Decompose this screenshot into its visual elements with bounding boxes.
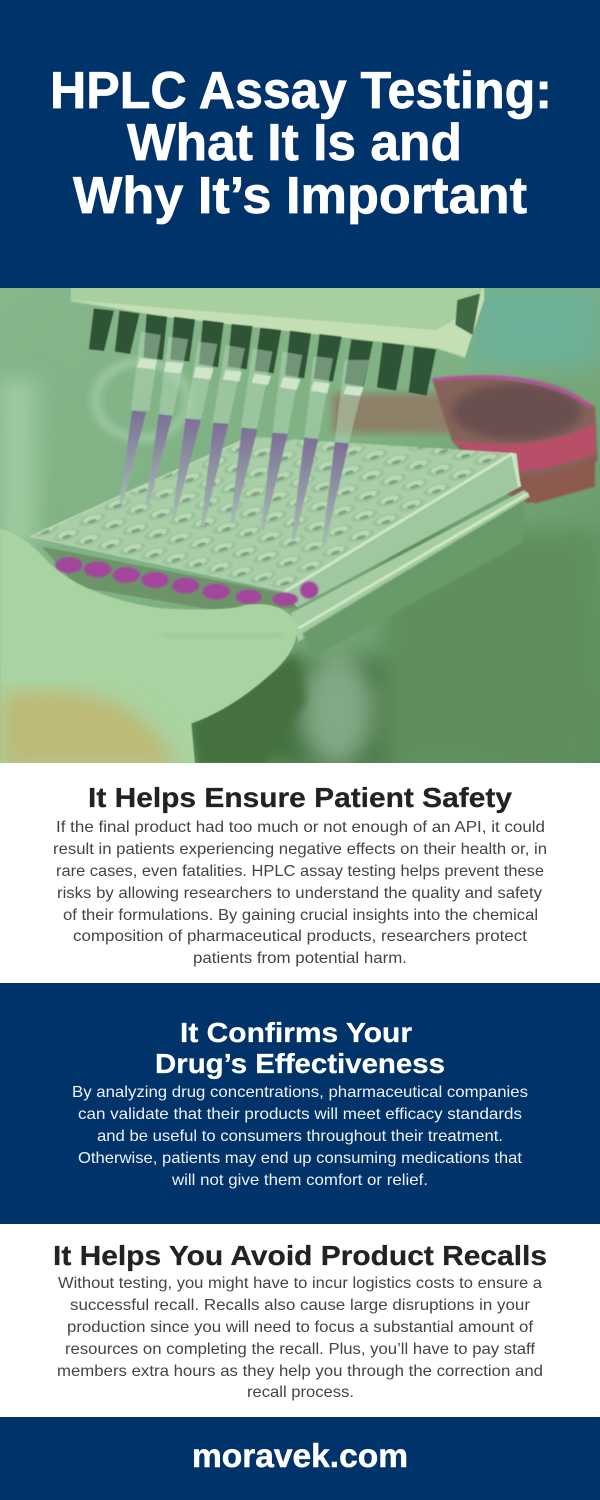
heading: effectiveness: It Confirms Your <box>180 1017 412 1048</box>
body: product recalls: recall process. <box>247 1384 354 1401</box>
footer panel <box>0 1417 600 1500</box>
body: effectiveness: By analyzing drug concentrations, pharmaceutical companies <box>72 1084 528 1101</box>
body: effectiveness: will not give them comfort or relief. <box>171 1172 428 1189</box>
body: patient safety: of their formulations. By gaining crucial insights into the chemical <box>63 907 538 924</box>
body: patient safety: rare cases, even fatalities. HPLC assay testing helps prevent these <box>56 863 544 880</box>
body: product recalls: production since you will need to focus a substantial amount of <box>67 1319 534 1336</box>
body: patient safety: patients from potential harm. <box>193 950 407 967</box>
panel: effectiveness <box>0 983 600 1224</box>
body: effectiveness <box>72 1084 528 1189</box>
body: product recalls: successful recall. Recalls also cause large disruptions in your <box>70 1297 531 1314</box>
title <box>50 62 552 225</box>
gloved hand and sleeve <box>0 528 306 767</box>
body: patient safety: If the final product had too much or not enough of an API, it could <box>56 819 545 836</box>
heading: patient safety: It Helps Ensure Patient Safety <box>88 782 512 813</box>
pipette head <box>71 287 484 358</box>
petri dish <box>333 377 598 503</box>
panel: patient safety <box>0 763 600 983</box>
body: product recalls: members extra hours as they help you through the correction and <box>57 1363 543 1380</box>
body: effectiveness: Otherwise, patients may end up consuming medications that <box>78 1150 523 1167</box>
photo: pipette filling a well plate, green tint <box>0 283 600 770</box>
body: product recalls <box>57 1275 543 1401</box>
pipette tips <box>119 332 369 544</box>
title: Why It’s Important <box>73 167 527 225</box>
body: product recalls: Without testing, you might have to incur logistics costs to ensure a <box>58 1275 542 1292</box>
website url: moravek.com <box>192 1437 408 1474</box>
panel: product recalls <box>0 1224 600 1417</box>
pink wells <box>55 557 318 606</box>
header panel <box>0 0 600 288</box>
nozzles <box>89 308 436 396</box>
body: patient safety: composition of pharmaceutical products, researchers protect <box>73 928 528 945</box>
body: patient safety: risks by allowing researchers to understand the quality and safety <box>57 885 542 902</box>
body: patient safety <box>53 819 547 967</box>
title: HPLC Assay Testing: <box>50 62 552 120</box>
body: product recalls: resources on completing the recall. Plus, you’ll have to pay staff <box>65 1341 536 1358</box>
heading: effectiveness <box>155 1017 445 1079</box>
heading: product recalls: It Helps You Avoid Product Recalls <box>53 1240 547 1271</box>
heading: effectiveness: Drug’s Effectiveness <box>155 1048 445 1079</box>
body: patient safety: result in patients experiencing negative effects on their health or, in <box>53 841 547 858</box>
body: effectiveness: and be useful to consumers throughout their treatment. <box>97 1128 503 1145</box>
title: What It Is and <box>127 114 462 172</box>
body: effectiveness: can validate that their products will meet efficacy standards <box>78 1106 522 1123</box>
well plate <box>29 437 530 657</box>
